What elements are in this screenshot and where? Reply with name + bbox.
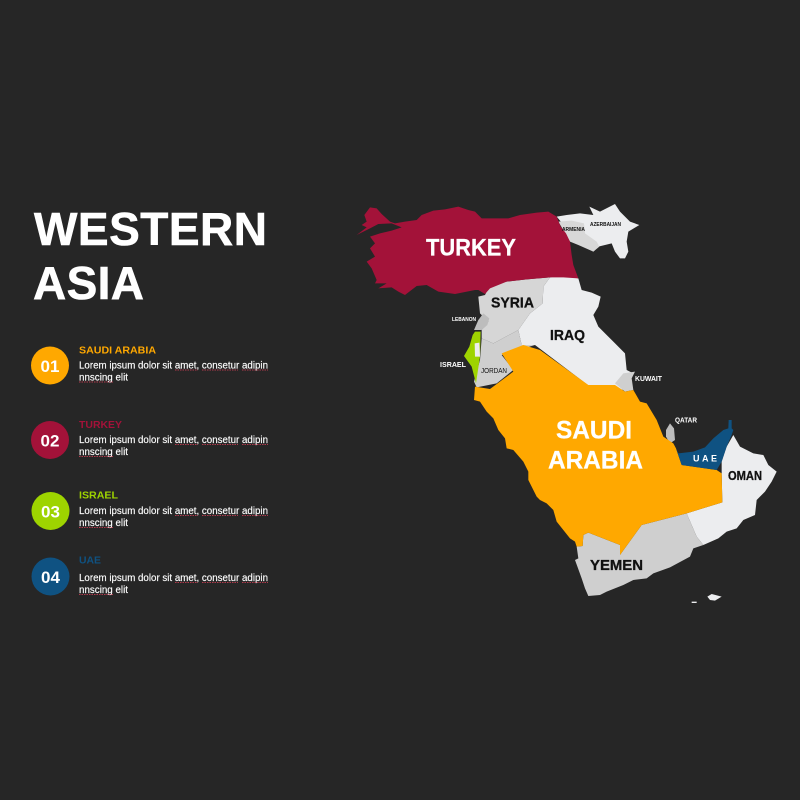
title: ASIA [33,257,144,309]
map labels: ISRAEL [440,360,466,369]
region: Iraq [518,275,633,390]
legend item 03: Israel: 03 [41,502,60,522]
region: Qatar [666,423,675,443]
legend item 04: UAE: Lorem ipsum dolor sit amet, consetur adipin [79,572,268,584]
legend item 02: Turkey: TURKEY [79,419,122,431]
region: Turkey [357,207,578,295]
map labels: UAE [693,454,717,464]
region: Jordan [474,330,535,387]
legend item 03: Israel: Lorem ipsum dolor sit amet, consetur adipin [79,505,268,517]
map labels: ARMENIA [562,227,585,233]
legend item 01: Saudi Arabia: nnscing elit [79,372,128,384]
map labels [426,222,762,574]
region: Yemen [575,513,703,596]
legend item 02: Turkey: 02 [41,432,59,450]
map labels: ARABIA [548,446,643,474]
legend item 04: UAE: 04 [41,568,60,587]
legend item 01: Saudi Arabia [31,344,268,384]
title: WESTERN [34,203,267,255]
region: UAE [676,420,733,470]
legend item 04: UAE: nnscing elit [79,584,128,596]
legend item 02: Turkey: nnscing elit [79,446,128,458]
legend item 02: Turkey: Lorem ipsum dolor sit amet, consetur adipin [79,434,268,446]
region: Syria [478,277,550,343]
map labels: OMAN [728,468,762,483]
region: Kuwait [615,372,635,392]
region: West Bank [475,343,480,357]
map: southern countries [474,345,777,603]
region: Oman [687,435,777,545]
region: Israel [464,332,481,383]
legend item 03: Israel [32,490,268,530]
region: Socotra [692,594,722,603]
legend item 04: UAE [32,554,268,596]
legend item 02: Turkey [31,419,268,459]
map labels: SAUDI [556,416,632,444]
map labels: LEBANON [452,317,476,323]
map: northern countries [357,204,639,390]
region: Lebanon [474,313,489,330]
legend item 03: Israel: nnscing elit [79,517,128,529]
map labels: TURKEY [426,234,516,262]
map labels: IRAQ [550,327,585,344]
map labels: YEMEN [590,557,643,574]
legend item 01: Saudi Arabia: 01 [41,357,59,376]
map labels: JORDAN [481,368,507,375]
map labels: KUWAIT [635,374,662,383]
region: Saudi Arabia [474,345,722,555]
legend item 01: Saudi Arabia: Lorem ipsum dolor sit amet, consetur adipin [79,360,268,372]
legend item 03: Israel: ISRAEL [79,490,119,502]
map labels: AZERBAIJAN [590,222,621,228]
title [33,203,267,309]
map of Western Asia [357,204,777,603]
map labels: SYRIA [491,294,534,312]
legend item 04: UAE: UAE [79,554,101,566]
legend item 01: Saudi Arabia: SAUDI ARABIA [79,344,156,356]
region: Azerbaijan and Georgia [557,204,639,258]
map labels: QATAR [675,418,697,424]
region: Armenia [558,221,599,252]
